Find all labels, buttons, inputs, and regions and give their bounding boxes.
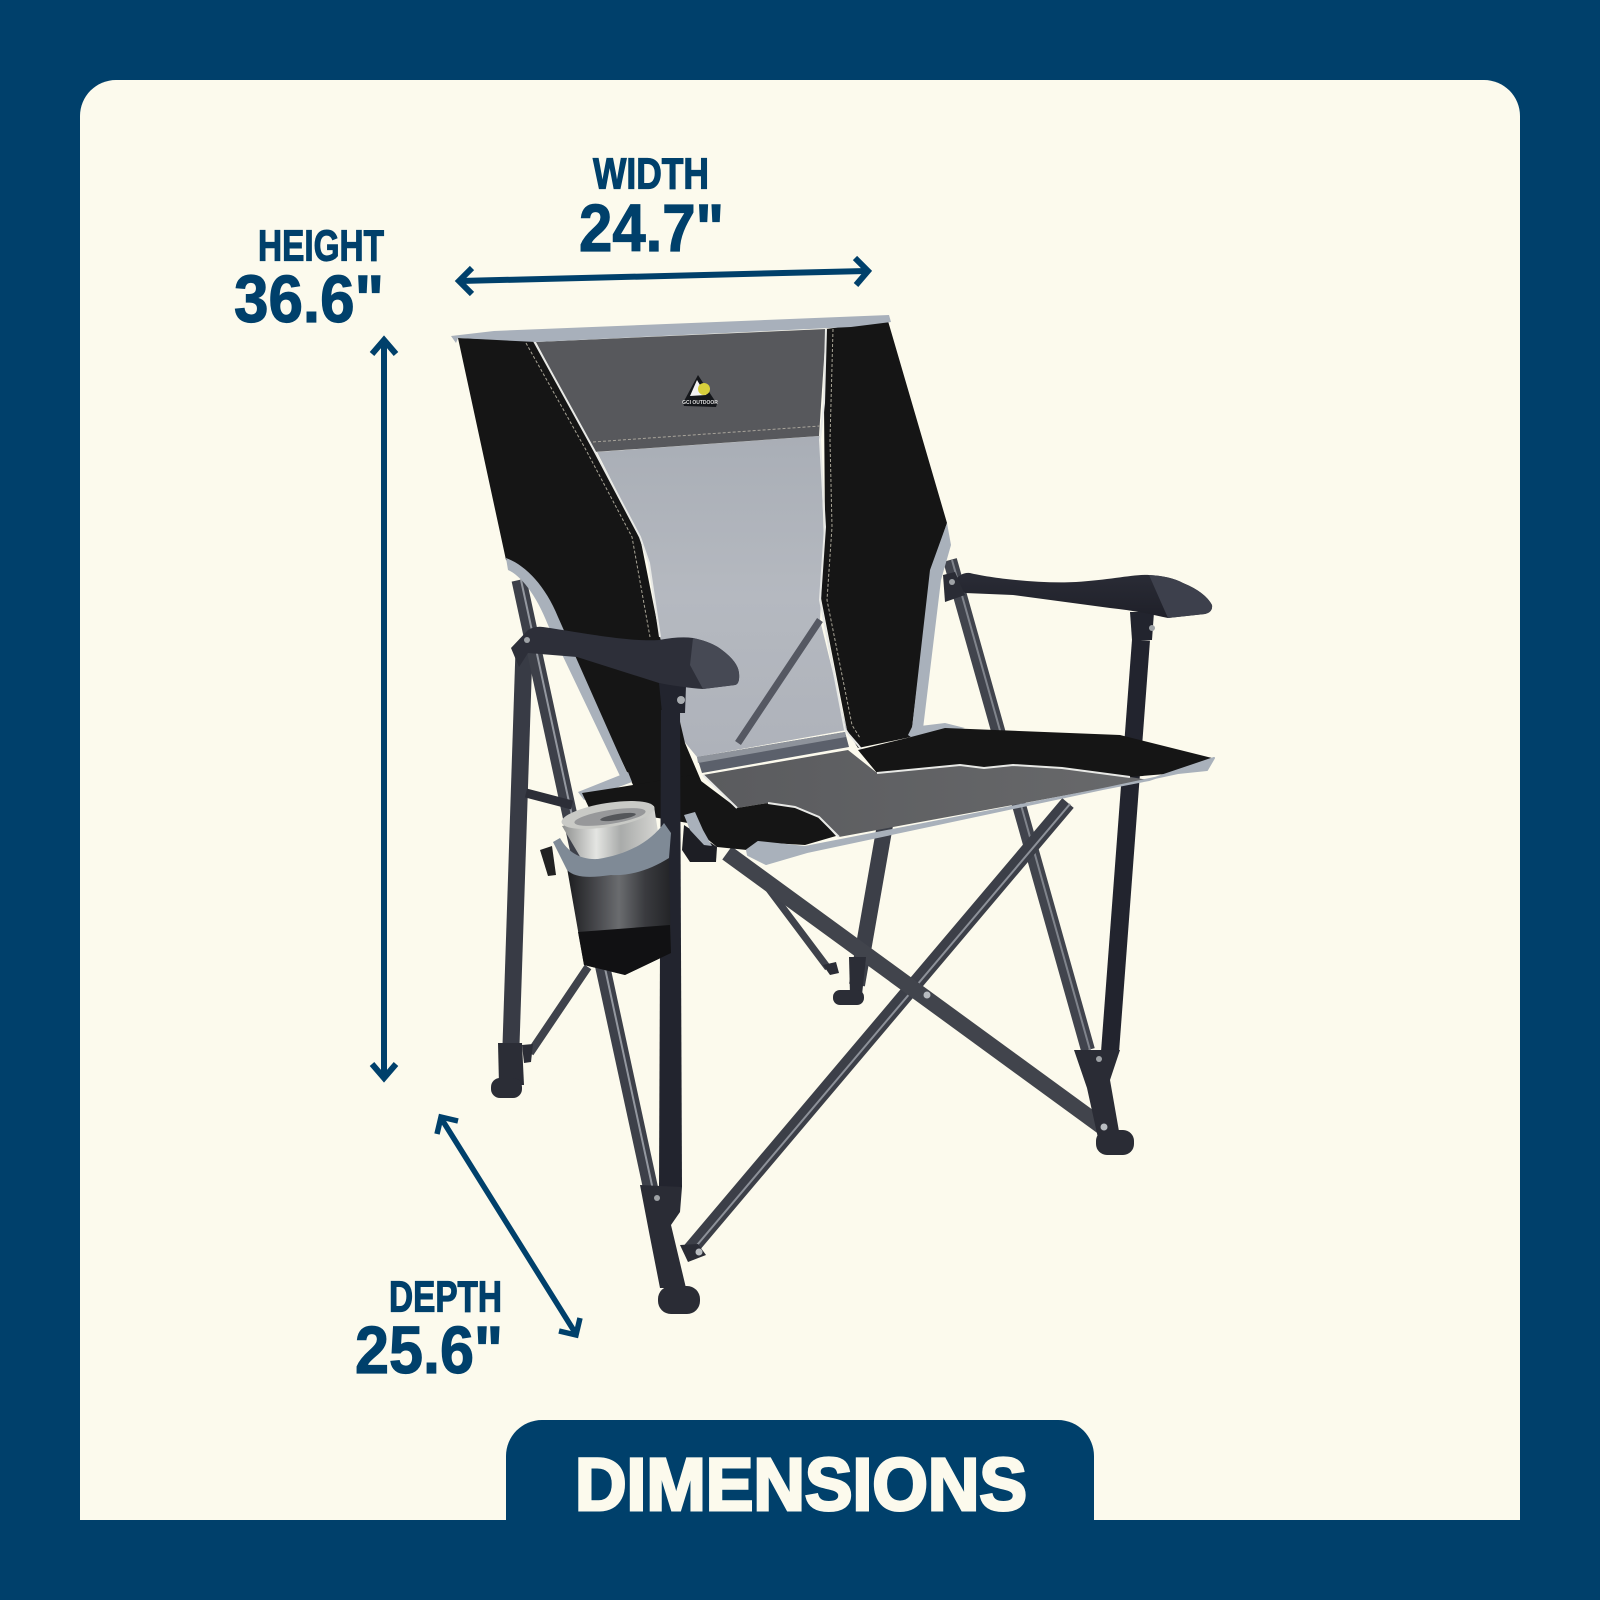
seat seams <box>703 765 1130 837</box>
pouch <box>567 856 671 975</box>
height label: HEIGHT <box>258 222 384 270</box>
rear feet <box>491 957 866 1098</box>
chair back: right black panel <box>820 321 947 748</box>
seat rear loop <box>908 723 965 742</box>
title tab: dimensions <box>506 1420 1094 1526</box>
chair back: left binding <box>506 558 628 776</box>
height label <box>234 222 384 337</box>
collar <box>553 823 671 877</box>
fabric seams <box>526 329 880 774</box>
left armrest post <box>659 710 682 1187</box>
logo badge <box>682 375 718 407</box>
chair back: grey top panel <box>536 329 826 452</box>
depth label: 25.6" <box>355 1313 503 1388</box>
arrow: depth <box>437 1117 580 1335</box>
chair back: right binding <box>911 523 951 737</box>
cross pivot bolt <box>924 992 930 998</box>
seat: grey center <box>703 750 1149 837</box>
chair <box>451 315 1214 1314</box>
right armrest <box>943 572 1212 640</box>
left base binding <box>578 772 632 800</box>
depth label <box>355 1272 503 1388</box>
height label: 36.6" <box>234 262 384 337</box>
cup holder with tumbler <box>540 796 671 975</box>
arrow: width <box>459 258 868 294</box>
width label: 24.7" <box>579 191 724 266</box>
drawcord toggle <box>540 846 556 876</box>
arrow: height <box>372 340 396 1078</box>
width label <box>579 150 724 266</box>
chair back: top binding <box>451 315 891 343</box>
depth label: DEPTH <box>389 1272 502 1322</box>
chair frame: rear tubes <box>511 560 1141 1190</box>
seat strap loop <box>684 812 712 846</box>
seat: front binding <box>747 758 1214 864</box>
tumbler top <box>562 806 660 865</box>
title text: DIMENSIONS <box>575 1443 1027 1526</box>
left armrest <box>511 627 739 713</box>
seat: right black panel <box>858 728 1212 777</box>
mesh bottom band <box>697 732 849 773</box>
logo badge: GCI OUTDOOR <box>682 400 718 406</box>
under-seat bracket <box>682 825 717 862</box>
front right foot <box>1074 1050 1134 1155</box>
width label: WIDTH <box>593 150 709 198</box>
mesh brace seen through <box>738 620 820 743</box>
cross tubes <box>690 803 1104 1251</box>
front left foot <box>640 1185 706 1314</box>
chair back: left black panel <box>458 338 705 800</box>
chair back: mesh panel <box>597 436 847 757</box>
seat: left black panel <box>582 775 836 850</box>
